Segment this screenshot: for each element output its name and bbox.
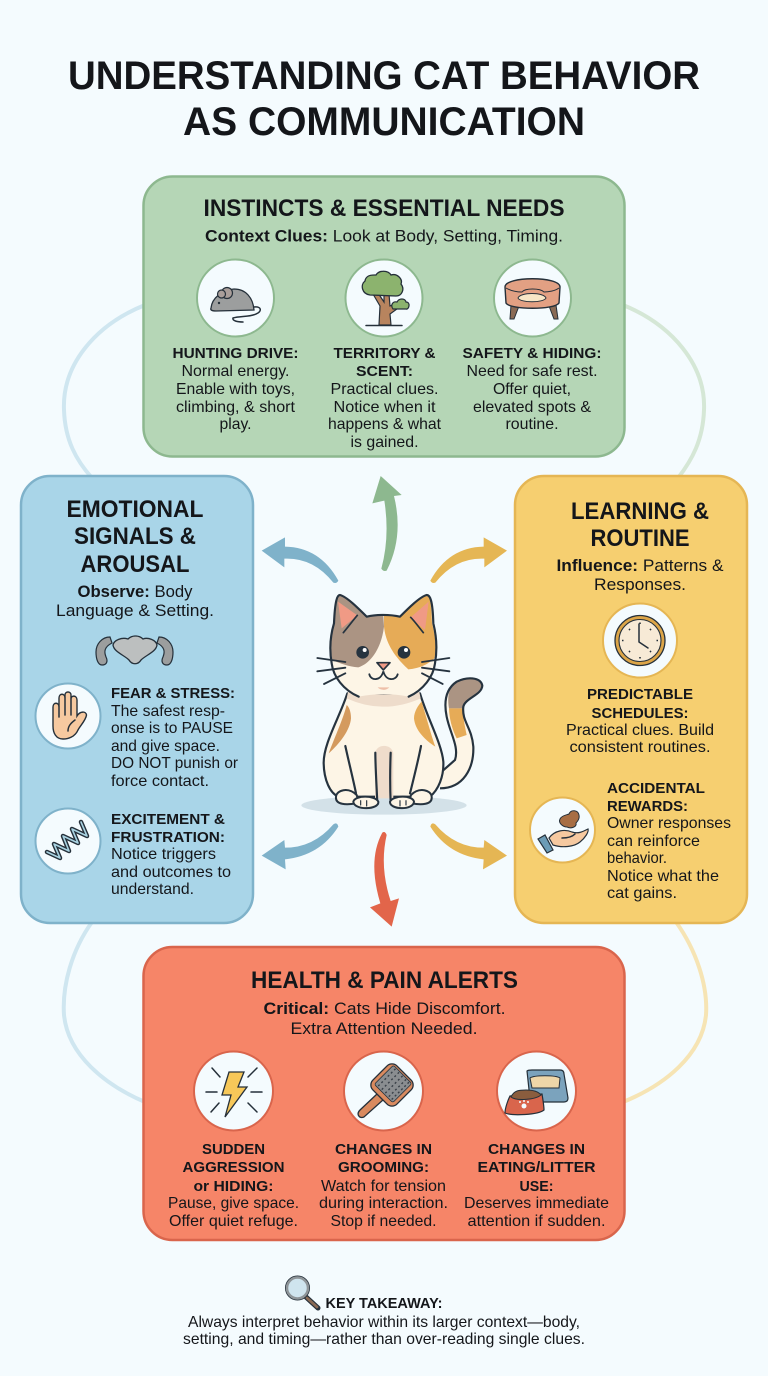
item: hunting drive xyxy=(172,345,298,433)
item: excitement and frustration: and outcomes to xyxy=(111,864,231,881)
item: territory and scent: Practical clues. xyxy=(330,381,438,398)
takeaway text: setting, and timing—rather than over-reading single clues. xyxy=(183,1331,585,1348)
connecting ring: top right xyxy=(623,305,704,478)
arrow: to emotional signals xyxy=(262,537,338,583)
heading: health: HEALTH & PAIN ALERTS xyxy=(251,967,518,994)
item: hunting drive: Enable with toys, xyxy=(176,381,295,398)
item: accidental rewards xyxy=(607,780,731,902)
item: safety and hiding: SAFETY & HIDING: xyxy=(462,345,602,362)
illustration: cat xyxy=(301,595,482,815)
item: accidental rewards: Notice what the xyxy=(607,868,719,885)
item: safety and hiding: Need for safe rest. xyxy=(466,363,598,380)
item: territory and scent: Notice when it xyxy=(334,399,436,416)
item: fear and stress: and give space. xyxy=(111,738,220,755)
item: changes in eating and litter use: CHANGES IN xyxy=(488,1141,585,1158)
item: excitement and frustration: FRUSTRATION: xyxy=(111,829,225,846)
item: changes in grooming: Watch for tension xyxy=(321,1178,446,1195)
heading: learning: ROUTINE xyxy=(590,525,690,552)
item: fear and stress xyxy=(111,685,238,790)
item: hunting drive: play. xyxy=(220,416,252,433)
item: changes in eating and litter use: EATING/LITTER xyxy=(478,1159,596,1176)
item: changes in grooming: during interaction. xyxy=(319,1195,448,1212)
item: excitement and frustration: understand. xyxy=(111,881,194,898)
title: AS COMMUNICATION xyxy=(183,100,585,144)
item: sudden aggression or hiding: Pause, give space. xyxy=(168,1195,299,1212)
subheading: observe xyxy=(56,582,214,620)
heading: emotional signals: EMOTIONAL xyxy=(66,496,204,523)
subheading: influence: Influence: Patterns & xyxy=(556,556,724,575)
takeaway text xyxy=(183,1314,585,1348)
connecting ring: top left xyxy=(64,305,145,478)
subheading: observe: Observe: Body xyxy=(78,582,193,601)
item: predictable schedules: SCHEDULES: xyxy=(592,705,688,722)
connecting ring: bottom right xyxy=(623,922,706,1102)
icon: clock xyxy=(603,604,677,678)
subheading: observe: Language & Setting. xyxy=(56,601,214,620)
item: hunting drive: climbing, & short xyxy=(176,399,296,416)
item: sudden aggression or hiding: Offer quiet refuge. xyxy=(169,1213,298,1230)
item: sudden aggression or hiding: SUDDEN xyxy=(202,1141,265,1158)
item: accidental rewards: cat gains. xyxy=(607,885,677,902)
subheading: influence xyxy=(556,556,724,594)
heading: emotional signals xyxy=(66,496,204,578)
subheading: critical xyxy=(264,999,506,1038)
item: territory and scent xyxy=(328,345,442,451)
icon: grooming brush xyxy=(344,1052,423,1130)
item: excitement and frustration: EXCITEMENT & xyxy=(111,811,225,828)
panel: instincts and essential needs xyxy=(144,176,624,456)
subheading: critical: Critical: Cats Hide Discomfort. xyxy=(264,999,506,1018)
subheading: critical: Extra Attention Needed. xyxy=(290,1019,478,1038)
heading: learning: LEARNING & xyxy=(571,498,709,525)
item: changes in eating and litter use: USE: xyxy=(520,1178,554,1195)
key takeaway xyxy=(183,1276,585,1348)
icon: lightning bolt xyxy=(194,1052,273,1130)
item: sudden aggression or hiding: AGGRESSION xyxy=(182,1159,284,1176)
item: safety and hiding: routine. xyxy=(506,416,558,433)
item: safety and hiding: Offer quiet, xyxy=(493,381,571,398)
panel: learning and routine xyxy=(515,476,747,923)
item: changes in grooming: GROOMING: xyxy=(338,1159,429,1176)
arrow: to health xyxy=(370,832,399,927)
item: territory and scent: TERRITORY & xyxy=(334,345,436,362)
icon: tree xyxy=(346,260,422,336)
item: hunting drive: Normal energy. xyxy=(182,363,290,380)
item: safety and hiding: elevated spots & xyxy=(473,399,591,416)
item: accidental rewards: behavior. xyxy=(607,850,667,867)
item: changes in grooming: CHANGES IN xyxy=(335,1141,432,1158)
heading: emotional signals: SIGNALS & xyxy=(74,523,196,550)
title: UNDERSTANDING CAT BEHAVIOR xyxy=(68,54,700,98)
arrow: to accidental rewards xyxy=(430,823,507,869)
item: fear and stress: DO NOT punish or xyxy=(111,755,238,772)
heading: instincts: INSTINCTS & ESSENTIAL NEEDS xyxy=(204,195,564,222)
item: fear and stress: onse is to PAUSE xyxy=(111,720,233,737)
item: territory and scent: SCENT: xyxy=(356,363,413,380)
item: predictable schedules: consistent routines. xyxy=(570,739,710,756)
item: accidental rewards: REWARDS: xyxy=(607,798,688,815)
item: changes in eating and litter use xyxy=(464,1141,609,1230)
icon: tangled squiggle xyxy=(36,808,100,874)
takeaway heading: KEY TAKEAWAY: xyxy=(326,1295,442,1312)
title xyxy=(68,54,700,144)
item: predictable schedules xyxy=(566,686,714,756)
arrow: to learning xyxy=(430,537,507,583)
item: excitement and frustration xyxy=(111,811,231,898)
panel: emotional signals and arousal xyxy=(21,476,253,923)
item: safety and hiding xyxy=(462,345,602,433)
arrow: to excitement xyxy=(262,823,338,869)
heading: emotional signals: AROUSAL xyxy=(80,551,190,578)
item: changes in eating and litter use: Deserves immediate xyxy=(464,1195,609,1212)
icon: cat bed xyxy=(494,260,571,336)
item: sudden aggression or hiding xyxy=(168,1141,299,1230)
takeaway text: Always interpret behavior within its larger context—body, xyxy=(188,1314,580,1331)
item: predictable schedules: PREDICTABLE xyxy=(587,686,693,703)
item: territory and scent: happens & what xyxy=(328,416,442,433)
item: hunting drive: HUNTING DRIVE: xyxy=(172,345,298,362)
icon: mouse xyxy=(197,260,274,336)
icon: food bowl and litter box xyxy=(497,1052,576,1130)
item: sudden aggression or hiding: or HIDING: xyxy=(194,1178,274,1195)
icon: arched back and tail xyxy=(96,636,173,665)
item: fear and stress: force contact. xyxy=(111,773,209,790)
item: fear and stress: The safest resp- xyxy=(111,703,225,720)
icon: magnifying glass xyxy=(286,1276,318,1308)
item: predictable schedules: Practical clues. Build xyxy=(566,722,714,739)
subheading: context clues: Context Clues: Look at Body, Setting, Timing. xyxy=(205,226,563,246)
item: accidental rewards: Owner responses xyxy=(607,815,731,832)
icon: raised hand xyxy=(36,684,100,748)
connecting ring: bottom left xyxy=(64,922,145,1102)
item: changes in grooming xyxy=(319,1141,448,1230)
icon: hand with treat xyxy=(530,798,595,862)
heading: learning xyxy=(571,498,709,552)
item: fear and stress: FEAR & STRESS: xyxy=(111,685,235,702)
subheading: influence: Responses. xyxy=(594,575,686,594)
item: accidental rewards: ACCIDENTAL xyxy=(607,780,705,797)
arrow: to instincts xyxy=(372,476,402,571)
item: excitement and frustration: Notice triggers xyxy=(111,846,216,863)
item: accidental rewards: can reinforce xyxy=(607,833,700,850)
item: changes in eating and litter use: attention if sudden. xyxy=(468,1213,606,1230)
central cat and arrows xyxy=(262,476,507,927)
item: territory and scent: is gained. xyxy=(350,434,418,451)
item: changes in grooming: Stop if needed. xyxy=(330,1213,436,1230)
panel: health and pain alerts xyxy=(144,947,624,1240)
